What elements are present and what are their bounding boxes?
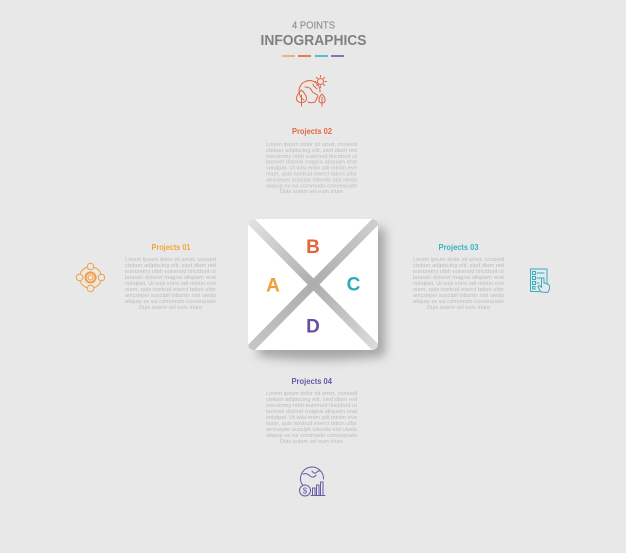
text block: Projects 02: aliquip ex ea commodo consequate	[266, 183, 357, 189]
text block: Projects 03: volutpat. Ut wisi enim adi minim eve	[413, 281, 504, 287]
title: 4 POINTS	[292, 20, 335, 32]
text block: Projects 01: Projects 01	[152, 243, 191, 252]
title: INFOGRAPHICS	[260, 33, 367, 49]
text block: Projects 01: nonummy nibh euismod tincidunt ut	[125, 269, 216, 275]
text block: Projects 04: Projects 04	[292, 377, 333, 386]
diagonal bands	[248, 219, 378, 350]
text block: Projects 01: Duis autem vel eum iriure	[139, 305, 202, 311]
text block: Projects 02: laoreet dolorei magna aliquam erat	[266, 160, 357, 166]
icon: globe with sun and trees	[296, 76, 326, 106]
text block: Projects 04: Lorem ipsum dolor sit amet, consedi	[266, 391, 357, 397]
icon: checklist with hand	[530, 269, 550, 292]
icon: globe with dollar coin and bars: $	[303, 486, 308, 496]
white square	[248, 219, 378, 350]
text block: Projects 04: nonummy nibh euismod tincidunt ut	[266, 403, 357, 409]
text block: Projects 03: ctetuer adipiscing elit, sied diam red	[413, 263, 504, 269]
text block: Projects 04	[266, 377, 358, 445]
text block: Projects 01: Lorem ipsum dolor sit amet, consed	[125, 257, 216, 263]
text block: Projects 04: amcorper suscipit lobortis nisl uteda	[266, 427, 358, 433]
text block: Projects 02: amcorper suscipit lobortis nisl uteda	[266, 177, 358, 183]
text block: Projects 04: laoreet dolorei magna aliquam erat	[266, 409, 357, 415]
letter B: B	[306, 237, 320, 258]
text block: Projects 04: ctetuer adipiscing elit, sied diam red	[266, 397, 357, 403]
text block: Projects 02: ctetuer adipiscing elit, sied diam red	[266, 148, 357, 154]
central X square	[240, 210, 387, 360]
text block: Projects 02: nonummy nibh euismod tincidunt ut	[266, 154, 357, 160]
text block: Projects 01	[125, 243, 217, 311]
text block: Projects 02: Lorem ipsum dolor sit amet, consedi	[266, 142, 357, 148]
letter D: D	[306, 316, 320, 338]
text block: Projects 03: niam, quis nostrud exerci tation ullor	[413, 287, 504, 293]
text block: Projects 02: Duis autem vel eum iriure	[280, 189, 343, 195]
text block: Projects 03: Duis autem vel eum iriure	[427, 305, 490, 311]
icon: globe with dollar coin and bars	[300, 467, 325, 496]
text block: Projects 03: nonummy nibh euismod tincidunt ut	[413, 269, 504, 275]
text block: Projects 02: Projects 02	[292, 127, 333, 136]
text block: Projects 03: Projects 03	[438, 243, 479, 252]
text block: Projects 02: niam, quis nostrud exerci tation ullor	[266, 172, 357, 178]
text block: Projects 01: laoreet dolorei magna aliquam erat	[125, 275, 216, 281]
text block: Projects 04: niam, quis nostrud exerci tation ullor	[266, 421, 357, 427]
text block: Projects 03: aliquip ex ea commodo consequate	[413, 299, 504, 305]
letter A: A	[266, 276, 280, 296]
title	[260, 20, 367, 49]
letter C: C	[347, 274, 361, 296]
text block: Projects 02: volutpat. Ut wisi enim adi minim eve	[266, 166, 357, 172]
text block: Projects 03: amcorper suscipit lobortis nisl uteda	[413, 293, 505, 299]
text block: Projects 01: amcorper suscipit lobortis nisl uteda	[125, 293, 217, 299]
text block: Projects 04: Duis autem vel eum iriure	[280, 439, 343, 445]
text block: Projects 03	[413, 243, 505, 311]
text block: Projects 04: volutpat. Ut wisi enim adi minim eve	[266, 415, 357, 421]
icon: gear with orbit nodes	[76, 263, 105, 292]
text block: Projects 02	[266, 127, 358, 195]
colour dashes	[282, 55, 344, 57]
text block: Projects 01: niam, quis nostrud exerci tation ullor	[125, 287, 216, 293]
text block: Projects 01: volutpat. Ut wisi enim adi minim eve	[125, 281, 216, 287]
text block: Projects 03: Lorem ipsum dolor sit amet, consedi	[413, 257, 504, 263]
text block: Projects 03: laoreet dolorei magna aliquam erat	[413, 275, 504, 281]
text block: Projects 01: aliquip ex ea commodo consequate	[125, 299, 216, 305]
text block: Projects 04: aliquip ex ea commodo consequate	[266, 433, 357, 439]
text block: Projects 01: ctetuer adipiscing elit, sied diam red	[125, 263, 216, 269]
square shadow	[258, 228, 385, 360]
